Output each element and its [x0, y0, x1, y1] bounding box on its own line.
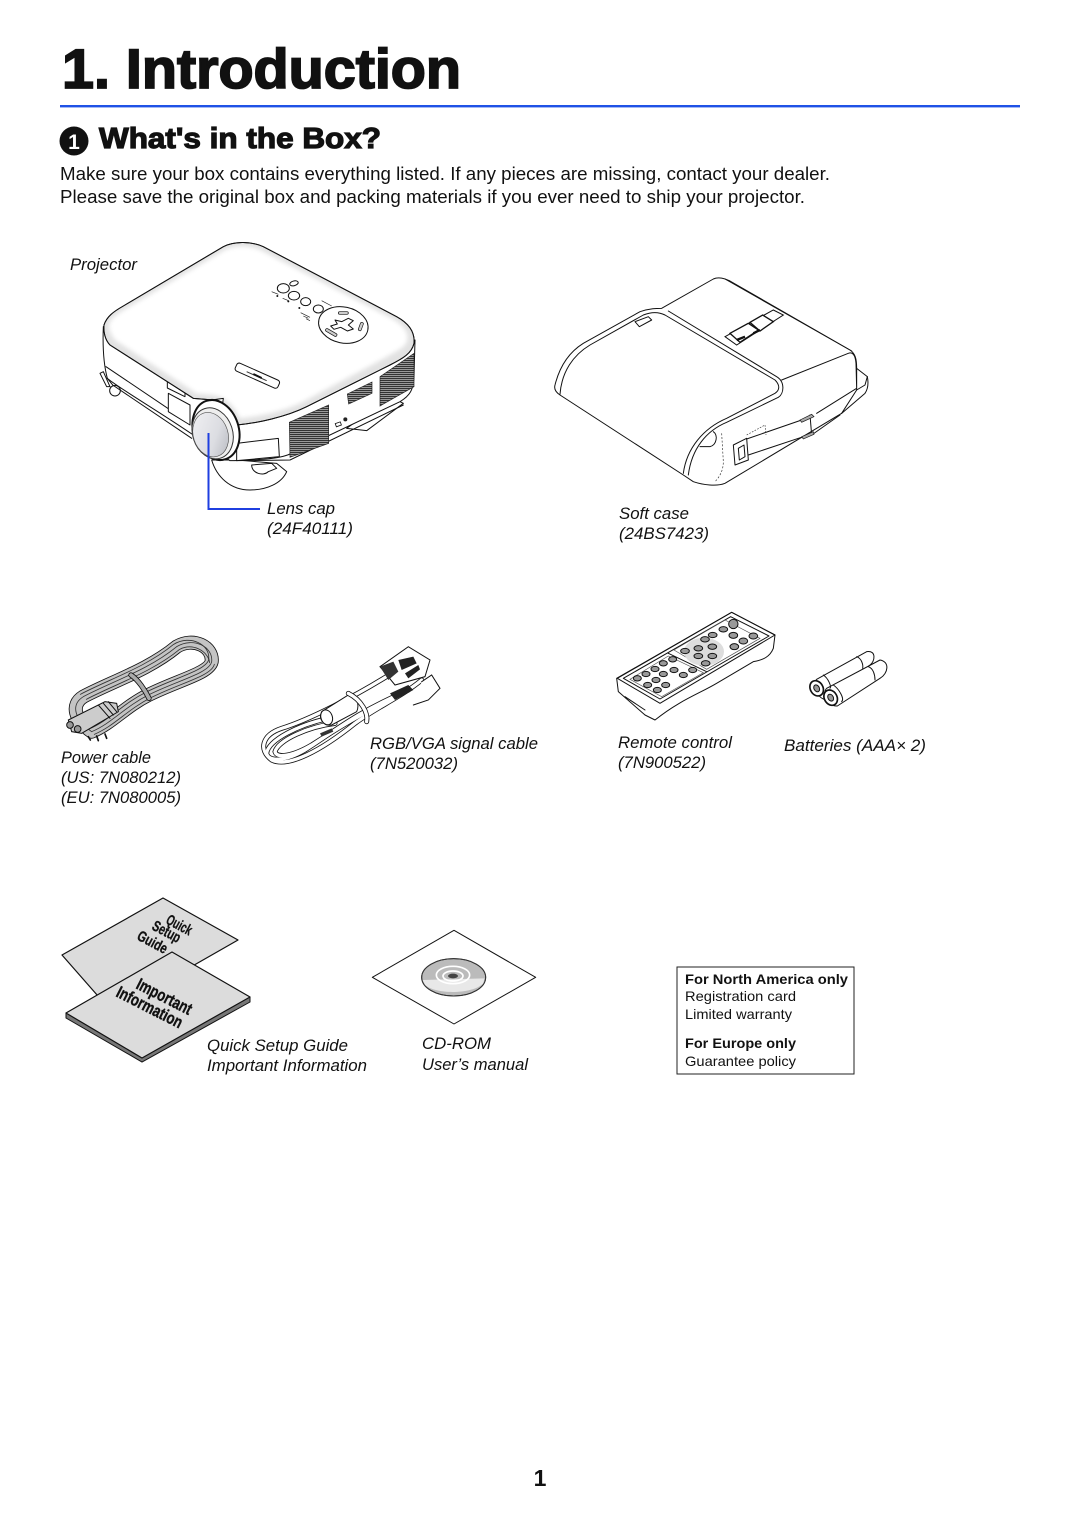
label: manuals: Quick Setup Guide	[207, 1036, 348, 1055]
control buttons	[277, 284, 289, 293]
illustration: quick setup guide sheet: Quick	[163, 912, 195, 939]
panel: regional documents: For North America only	[685, 971, 848, 987]
side panels	[167, 380, 185, 397]
blue title rule	[60, 105, 1020, 107]
vents	[289, 405, 329, 457]
illustration: CD-ROM sleeve	[372, 930, 536, 1024]
feet and stand	[212, 460, 287, 490]
label: CD-ROM: CD-ROM	[422, 1034, 492, 1053]
illustration: important information booklet: Information	[113, 983, 186, 1032]
panel: regional documents: Limited warranty	[685, 1006, 792, 1022]
icon: numbered bullet: 1	[68, 131, 80, 154]
panel: regional documents: Guarantee policy	[685, 1053, 796, 1069]
ferrite core	[321, 695, 358, 725]
illustration: quick setup guide sheet: Setup	[149, 918, 184, 947]
label: power cable: Power cable	[61, 748, 151, 767]
lens ring and glass	[212, 398, 223, 403]
logo plate	[234, 362, 280, 389]
title: 1. Introduction	[62, 37, 461, 100]
arrow: lens cap leader line	[208, 433, 260, 509]
label: CD-ROM	[422, 1034, 529, 1074]
label: RGB/VGA signal cable	[370, 734, 538, 773]
label: lens cap: Lens cap	[267, 499, 335, 518]
illustration: RGB/VGA signal cable	[264, 647, 440, 762]
illustration: important information booklet: Important	[133, 975, 195, 1019]
icon: numbered bullet	[60, 126, 88, 156]
plug	[68, 702, 118, 733]
label: power cable: (US: 7N080212)	[61, 768, 181, 787]
control dial	[315, 302, 372, 348]
label: soft case: (24BS7423)	[619, 524, 709, 543]
illustration: remote control	[617, 612, 775, 720]
panel: regional documents	[677, 967, 854, 1074]
label: projector: Projector	[70, 255, 138, 274]
illustration: projector	[100, 243, 415, 490]
label: RGB/VGA signal cable: (7N520032)	[370, 754, 458, 773]
label: remote control	[618, 733, 733, 772]
label: batteries: Batteries (AAA× 2)	[784, 736, 926, 755]
cable tie	[348, 693, 367, 722]
chassis	[103, 327, 415, 461]
top shell	[104, 243, 414, 425]
page number: 1	[534, 1465, 547, 1491]
illustration: quick setup guide sheet: Guide	[134, 928, 170, 958]
label: manuals	[207, 1036, 367, 1075]
side handle	[733, 438, 748, 465]
label: soft case: Soft case	[619, 504, 689, 523]
label: remote control: (7N900522)	[618, 753, 706, 772]
label: power cable	[61, 748, 181, 807]
intro text block	[60, 163, 830, 207]
section heading	[60, 123, 381, 156]
intro text block: Please save the original box and packing materials if you ever need to ship your projector.	[60, 186, 805, 207]
coil body	[76, 643, 212, 732]
cable tie	[131, 675, 149, 698]
illustration: power cable	[67, 640, 214, 741]
label: manuals: Important Information	[207, 1056, 367, 1075]
heading text: What's in the Box?	[99, 123, 381, 155]
ports	[335, 422, 341, 427]
strap and buckle	[725, 310, 783, 345]
label: remote control: Remote control	[618, 733, 733, 752]
illustration: quick setup guide sheet	[62, 898, 238, 1012]
label: soft case	[619, 504, 709, 543]
intro text block: Make sure your box contains everything listed. If any pieces are missing, contact your dealer.	[60, 163, 830, 184]
connectors	[380, 647, 430, 685]
label: lens cap: (24F40111)	[267, 519, 353, 538]
panel: regional documents: For Europe only	[685, 1035, 796, 1051]
illustration: soft case	[555, 278, 868, 485]
label: lens cap	[267, 499, 353, 538]
illustration: important information booklet	[66, 952, 250, 1062]
label: RGB/VGA signal cable: RGB/VGA signal cable	[370, 734, 538, 753]
label: CD-ROM: User’s manual	[422, 1055, 529, 1074]
label: power cable: (EU: 7N080005)	[61, 788, 181, 807]
panel: regional documents: Registration card	[685, 988, 796, 1004]
illustration: batteries	[807, 652, 887, 708]
